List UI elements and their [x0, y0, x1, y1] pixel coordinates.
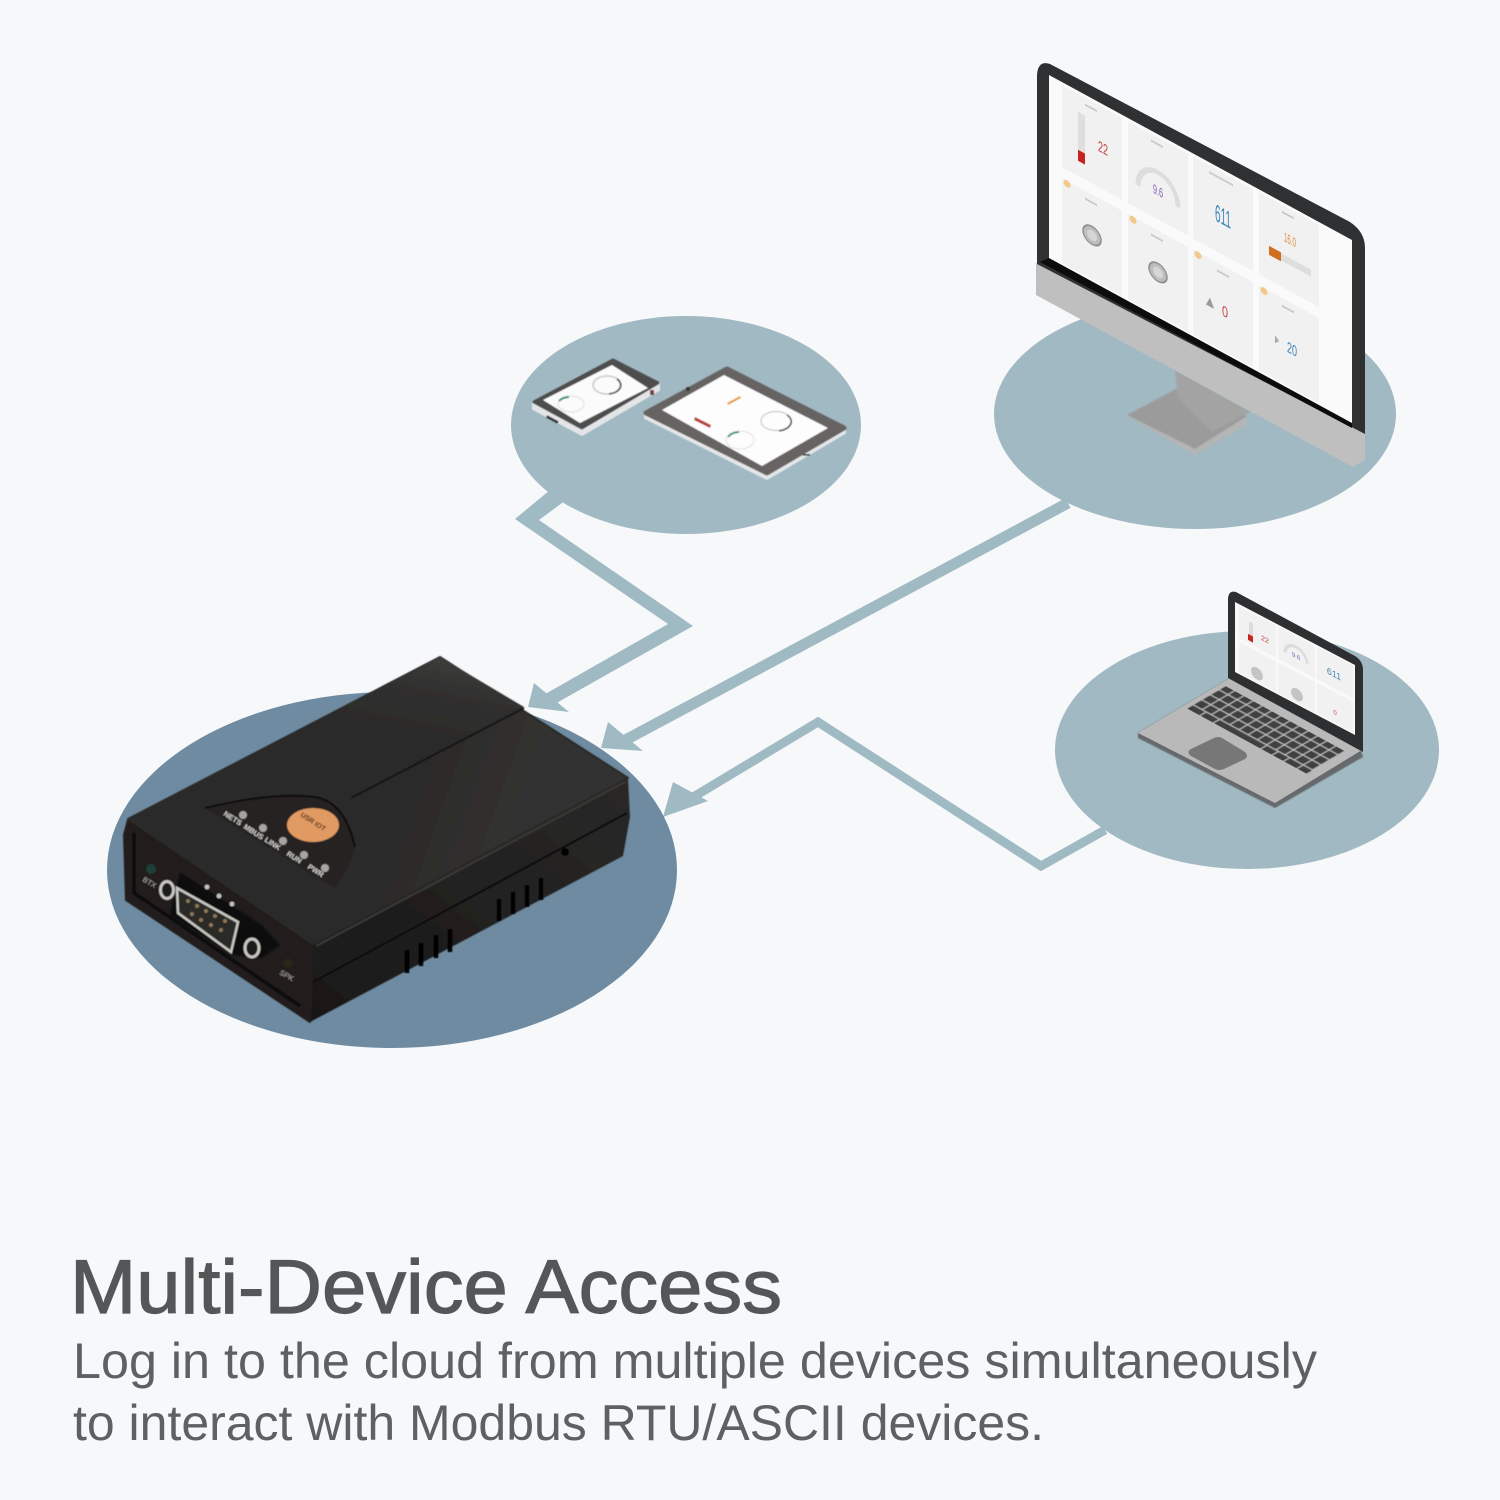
- value 20 with icon: 20: [1287, 339, 1297, 361]
- icon: laptop: [1138, 592, 1363, 808]
- title: Multi-Device Access: [70, 1245, 782, 1330]
- arrow: tablet to gateway: [515, 490, 693, 712]
- top pins: [205, 885, 234, 906]
- gateway backdrop circle: [107, 692, 677, 1048]
- gateway device: serial to cloud converter: [124, 657, 630, 1022]
- icon: desktop monitor: [1036, 63, 1365, 467]
- arrow: laptop to gateway: [663, 722, 1105, 866]
- indicator left with label: [141, 864, 158, 890]
- device shoulder highlight: [316, 782, 625, 946]
- value 0 with icon: 0: [1222, 302, 1228, 322]
- LED labels: LINK: [263, 835, 283, 853]
- laptop base: [1138, 678, 1363, 808]
- far end of device top: [128, 657, 524, 819]
- description text: [73, 1333, 1317, 1451]
- LED labels: NETS: [222, 809, 244, 828]
- side vents lower: [407, 929, 450, 973]
- description text: Log in to the cloud from multiple devices simultaneously: [73, 1333, 1317, 1389]
- DB9 serial connector: [160, 872, 280, 958]
- laptop screen: 611: [1327, 666, 1341, 684]
- dial gauge reading 9.6: 9.6: [1153, 181, 1163, 201]
- LED labels: PWR: [306, 862, 326, 880]
- dial gauge reading 9.6: [1138, 161, 1178, 209]
- icon: tablet: [645, 369, 845, 479]
- monitor bezel: [1037, 63, 1365, 434]
- monitor chin: [1036, 263, 1365, 467]
- LED labels: RUN: [285, 849, 303, 866]
- monitor stand: [1127, 370, 1250, 455]
- tablet and phone backdrop circle: [511, 316, 861, 534]
- laptop screen: [1235, 602, 1355, 735]
- LED labels: MBUS: [242, 822, 265, 842]
- side vents upper: [499, 878, 541, 921]
- status LEDs: [239, 811, 329, 872]
- device side face: [310, 778, 630, 1022]
- icon: phone: [533, 360, 659, 435]
- round indicator one: [1083, 222, 1101, 249]
- device seam: [313, 813, 627, 982]
- laptop keyboard: [1189, 688, 1343, 772]
- description text: to interact with Modbus RTU/ASCII devices.: [73, 1395, 1044, 1451]
- bar gauge reading 16.0: 16.0: [1284, 229, 1296, 250]
- laptop lid: [1228, 592, 1363, 752]
- LED labels: [222, 809, 326, 880]
- indicator left with label: BTX: [141, 875, 158, 890]
- orange logo: [287, 808, 339, 842]
- arrow: monitor to gateway: [601, 503, 1068, 751]
- front recess edge: [134, 833, 300, 1006]
- value 20 with icon: [1275, 332, 1297, 361]
- status dots: [1064, 178, 1268, 296]
- monitor screen with dashboard: [1049, 75, 1352, 423]
- device top face: [128, 657, 628, 944]
- laptop screen: 9.6: [1292, 651, 1301, 662]
- bar gauge reading 16.0: [1269, 221, 1311, 278]
- laptop screen: 22: [1261, 633, 1269, 646]
- round indicator two: [1149, 258, 1167, 286]
- level gauge reading 22: 22: [1098, 138, 1108, 160]
- device front face: [124, 820, 313, 1022]
- laptop trackpad: [1188, 737, 1247, 770]
- device badge panel: [205, 796, 355, 888]
- value 0 with icon: [1206, 293, 1228, 322]
- right screw: [245, 939, 259, 957]
- indicator right with label: SPK: [278, 968, 296, 983]
- monitor screen with dashboard: 611: [1215, 200, 1231, 235]
- indicator right with label: [278, 958, 296, 983]
- monitor backdrop circle: [994, 299, 1396, 529]
- device groove line: [351, 708, 524, 798]
- orange logo: USR IOT: [299, 812, 327, 834]
- left screw: [160, 882, 174, 898]
- level gauge reading 22: [1078, 112, 1108, 177]
- panel captions: [1085, 104, 1294, 313]
- laptop screen: 0: [1333, 709, 1337, 717]
- side port hole: [561, 848, 569, 856]
- laptop backdrop circle: [1055, 631, 1439, 869]
